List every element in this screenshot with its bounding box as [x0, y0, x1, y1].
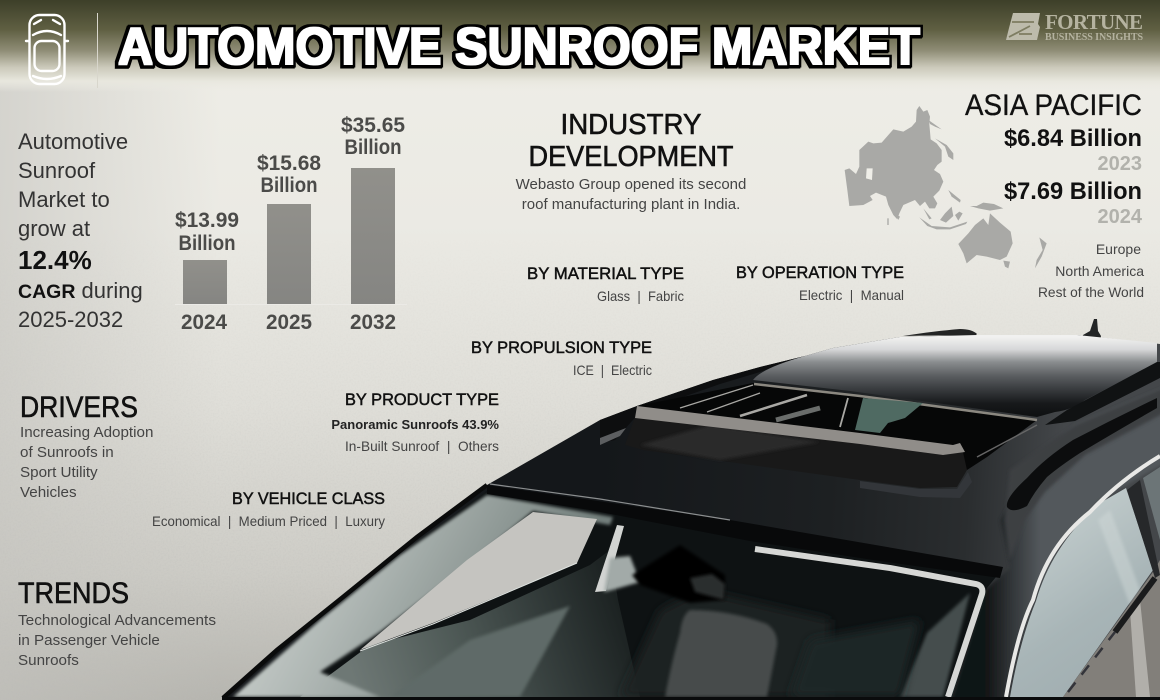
- segment: product type: Panoramic Sunroofs 43.9%: [331, 417, 499, 432]
- wind deflector: [625, 417, 967, 488]
- drivers: Vehicles: [20, 484, 77, 501]
- other regions list: Europe: [1096, 241, 1141, 257]
- white road line on door: [1130, 600, 1150, 697]
- other regions list: North America: [1055, 263, 1144, 279]
- region: Asia Pacific figures: [965, 89, 1143, 228]
- header icon: car top view: [26, 15, 68, 84]
- deflector lip reflection: [860, 472, 972, 498]
- b-pillar: [1127, 480, 1160, 578]
- interior streak: [390, 606, 570, 697]
- door edge smudge: [1115, 578, 1155, 632]
- CAGR text block: Automotive: [18, 129, 128, 154]
- drivers: DRIVERS: [20, 391, 138, 424]
- bar chart: Billion: [344, 135, 402, 159]
- industry development heading: DEVELOPMENT: [528, 141, 734, 173]
- roof side shade: [952, 415, 1160, 697]
- interior green reflection: [855, 398, 923, 433]
- roof antenna: [1082, 319, 1101, 349]
- windshield base: [233, 491, 1000, 697]
- region: Asia Pacific figures: $7.69 Billion: [1004, 178, 1142, 205]
- seat surround: [620, 590, 830, 697]
- mirror highlight: [690, 574, 725, 600]
- CAGR text block: Sunroof: [18, 158, 96, 183]
- roof black trim: [1045, 362, 1160, 425]
- trends: [18, 577, 216, 669]
- segment: propulsion type: BY PROPULSION TYPE: [471, 338, 652, 357]
- window chrome trim: [1006, 456, 1160, 697]
- drivers: Sport Utility: [20, 464, 98, 481]
- left roof strip: [600, 356, 805, 443]
- logo: Fortune Business Insights: BUSINESS INSIGHTS: [1045, 32, 1143, 43]
- other regions list: [1038, 241, 1144, 300]
- upper pillar shade: [1005, 385, 1160, 560]
- drivers: Increasing Adoption: [20, 424, 153, 441]
- side glass: [1010, 488, 1153, 697]
- logo: Fortune Business Insights: [1006, 10, 1143, 43]
- small chrome pillar: [595, 525, 624, 592]
- CAGR text block: [18, 129, 143, 332]
- industry development heading: INDUSTRY: [560, 109, 702, 141]
- reflection lower highlight: [360, 563, 577, 651]
- grey side strip: [600, 428, 626, 445]
- rear-view mirror: [632, 545, 725, 603]
- segment: operation type: [736, 263, 904, 303]
- sliding roof panel: [753, 335, 1157, 417]
- bar chart: Billion: [260, 173, 318, 197]
- bar chart: 2032: [350, 310, 396, 334]
- region: Asia Pacific figures: $6.84 Billion: [1004, 125, 1142, 152]
- trends: Sunroofs: [18, 652, 79, 669]
- segment: operation type: Electric | Manual: [799, 287, 904, 303]
- mirror area glass: [604, 556, 640, 592]
- segment: vehicle class: Economical | Medium Priced | Luxury: [152, 513, 385, 529]
- bar chart: Billion: [178, 231, 236, 255]
- car body: [223, 335, 1160, 700]
- bar chart: 2024: [181, 310, 227, 334]
- bar chart: [175, 113, 407, 334]
- pale glass stripe: [1098, 510, 1140, 605]
- CAGR text block: Market to: [18, 187, 110, 212]
- drivers: [20, 391, 153, 501]
- region: Asia Pacific figures: ASIA PACIFIC: [965, 89, 1142, 122]
- pillar outline: [223, 485, 487, 698]
- trends: TRENDS: [18, 577, 129, 610]
- car photo: [222, 319, 1160, 700]
- CAGR text block: CAGR during: [18, 278, 143, 303]
- bar chart: $15.68: [257, 151, 321, 175]
- industry development heading: [528, 109, 734, 173]
- segment: operation type: BY OPERATION TYPE: [736, 263, 904, 282]
- region: Asia Pacific figures: 2024: [1098, 206, 1143, 228]
- deflector top band: [635, 406, 965, 455]
- roof highlight line: [490, 484, 730, 520]
- CAGR text block: 2025-2032: [18, 307, 123, 332]
- segment: propulsion type: ICE | Electric: [573, 362, 652, 378]
- title: AUTOMOTIVE SUNROOF MARKET: [118, 18, 920, 76]
- CAGR text block: grow at: [18, 216, 90, 241]
- reflection of road: [360, 512, 597, 650]
- industry development text: roof manufacturing plant in India.: [522, 196, 740, 213]
- segment: propulsion type: [471, 338, 652, 378]
- CAGR text block: 12.4%: [18, 245, 92, 275]
- interior rails: [680, 385, 1037, 457]
- segment: vehicle class: BY VEHICLE CLASS: [232, 489, 385, 508]
- other regions list: Rest of the World: [1038, 284, 1144, 300]
- near roof rail: [1007, 398, 1157, 510]
- industry development text: Webasto Group opened its second: [516, 176, 746, 193]
- industry development text: [516, 176, 746, 213]
- lower glass: [300, 550, 640, 697]
- segment: vehicle class: [152, 489, 385, 529]
- door edge lower line: [1068, 632, 1115, 692]
- seat: [665, 610, 777, 697]
- windshield chrome frame: [755, 549, 982, 697]
- header divider: [97, 13, 98, 88]
- bottom edge: [222, 697, 1160, 700]
- door panel: [1063, 560, 1160, 697]
- segment: material type: Glass | Fabric: [597, 288, 684, 304]
- trends: in Passenger Vehicle: [18, 632, 160, 649]
- panel lower edge: [754, 384, 1037, 420]
- logo text: FORTUNE: [1045, 10, 1143, 34]
- segment: material type: BY MATERIAL TYPE: [527, 264, 684, 283]
- pale glass band: [233, 495, 613, 697]
- lower interior shade: [790, 620, 920, 697]
- segment: material type: [527, 264, 684, 304]
- segment: product type: In-Built Sunroof | Others: [345, 438, 499, 454]
- bar chart: 2025: [266, 310, 312, 334]
- trends: Technological Advancements: [18, 612, 216, 629]
- deflector highlight: [640, 425, 820, 460]
- roof line: [487, 485, 1003, 578]
- drivers: of Sunroofs in: [20, 444, 114, 461]
- segment: product type: BY PRODUCT TYPE: [345, 390, 499, 409]
- bar chart: $13.99: [175, 208, 239, 232]
- lower right interior: [900, 593, 970, 697]
- bar chart: $35.65: [341, 113, 405, 137]
- region: Asia Pacific figures: 2023: [1098, 153, 1142, 175]
- logo mark: [1006, 13, 1040, 40]
- map: Asia Pacific: [845, 106, 1047, 268]
- sunroof opening: [637, 383, 1037, 470]
- far roof rail: [903, 329, 977, 336]
- segment: product type: [331, 390, 499, 454]
- rear side window: [1143, 467, 1160, 540]
